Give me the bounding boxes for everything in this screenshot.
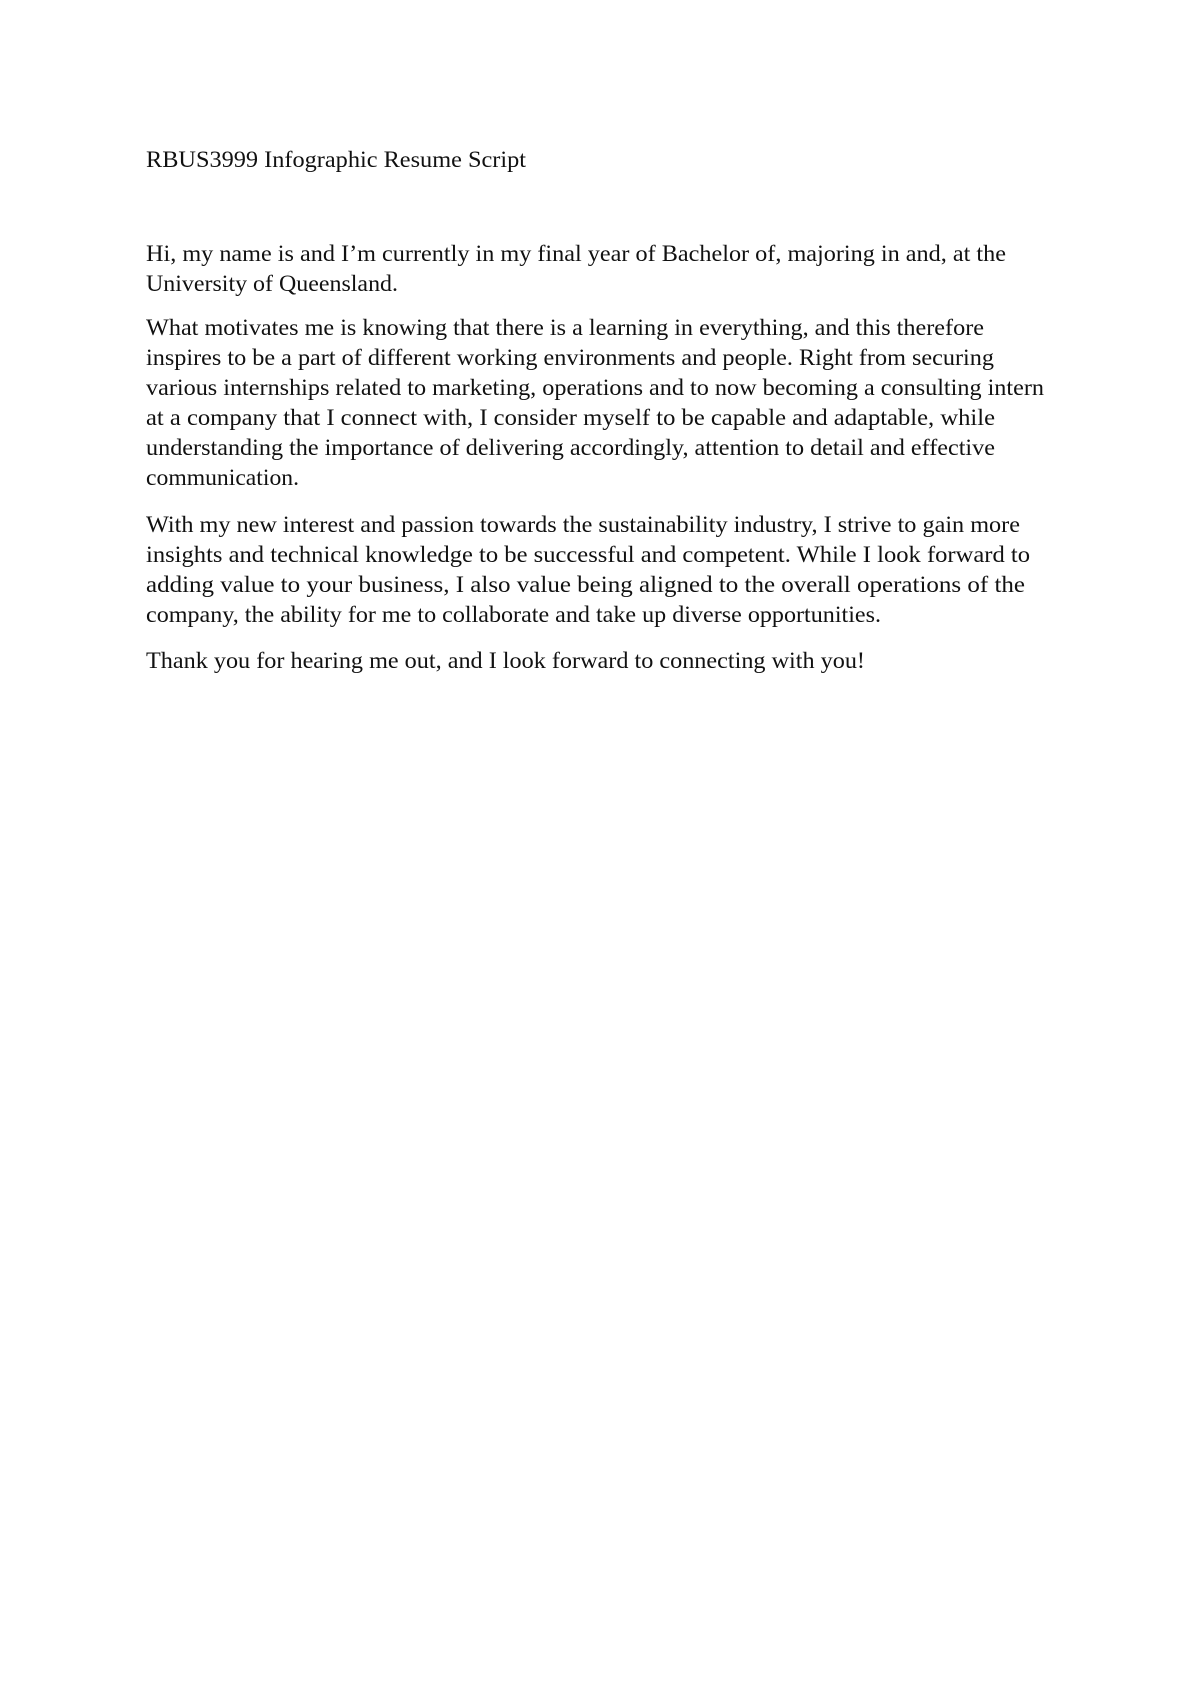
paragraph: sustainability interest (146, 512, 1030, 627)
paragraph: motivation: at a company that I connect with, I consider myself to be capable and adaptable, while (146, 405, 995, 430)
title: RBUS3999 Infographic Resume Script (146, 147, 527, 172)
paragraph: sustainability interest: insights and technical knowledge to be successful and competent. While I look forward to (146, 542, 1030, 567)
paragraph: introduction (146, 241, 1006, 296)
paragraph: sustainability interest: With my new interest and passion towards the sustainability industry, I strive to gain more (146, 512, 1020, 537)
paragraph: motivation (146, 315, 1045, 490)
paragraph: introduction: Hi, my name is and I’m currently in my final year of Bachelor of, majoring in and, at the (146, 241, 1006, 266)
paragraph: motivation: various internships related to marketing, operations and to now becoming a consulting intern (146, 375, 1045, 400)
paragraph: motivation: What motivates me is knowing that there is a learning in everything, and this therefore (146, 315, 984, 340)
paragraph: motivation: communication. (146, 465, 299, 490)
paragraph: motivation: inspires to be a part of different working environments and people. Right from securing (146, 345, 995, 370)
paragraph: motivation: understanding the importance of delivering accordingly, attention to detail and effective (146, 435, 995, 460)
paragraph: introduction: University of Queensland. (146, 271, 398, 296)
paragraph: closing: Thank you for hearing me out, and I look forward to connecting with you! (146, 648, 865, 673)
paragraph: sustainability interest: adding value to your business, I also value being aligned to the overall operations of the (146, 572, 1025, 597)
paragraph: sustainability interest: company, the ability for me to collaborate and take up diverse opportunities. (146, 602, 881, 627)
